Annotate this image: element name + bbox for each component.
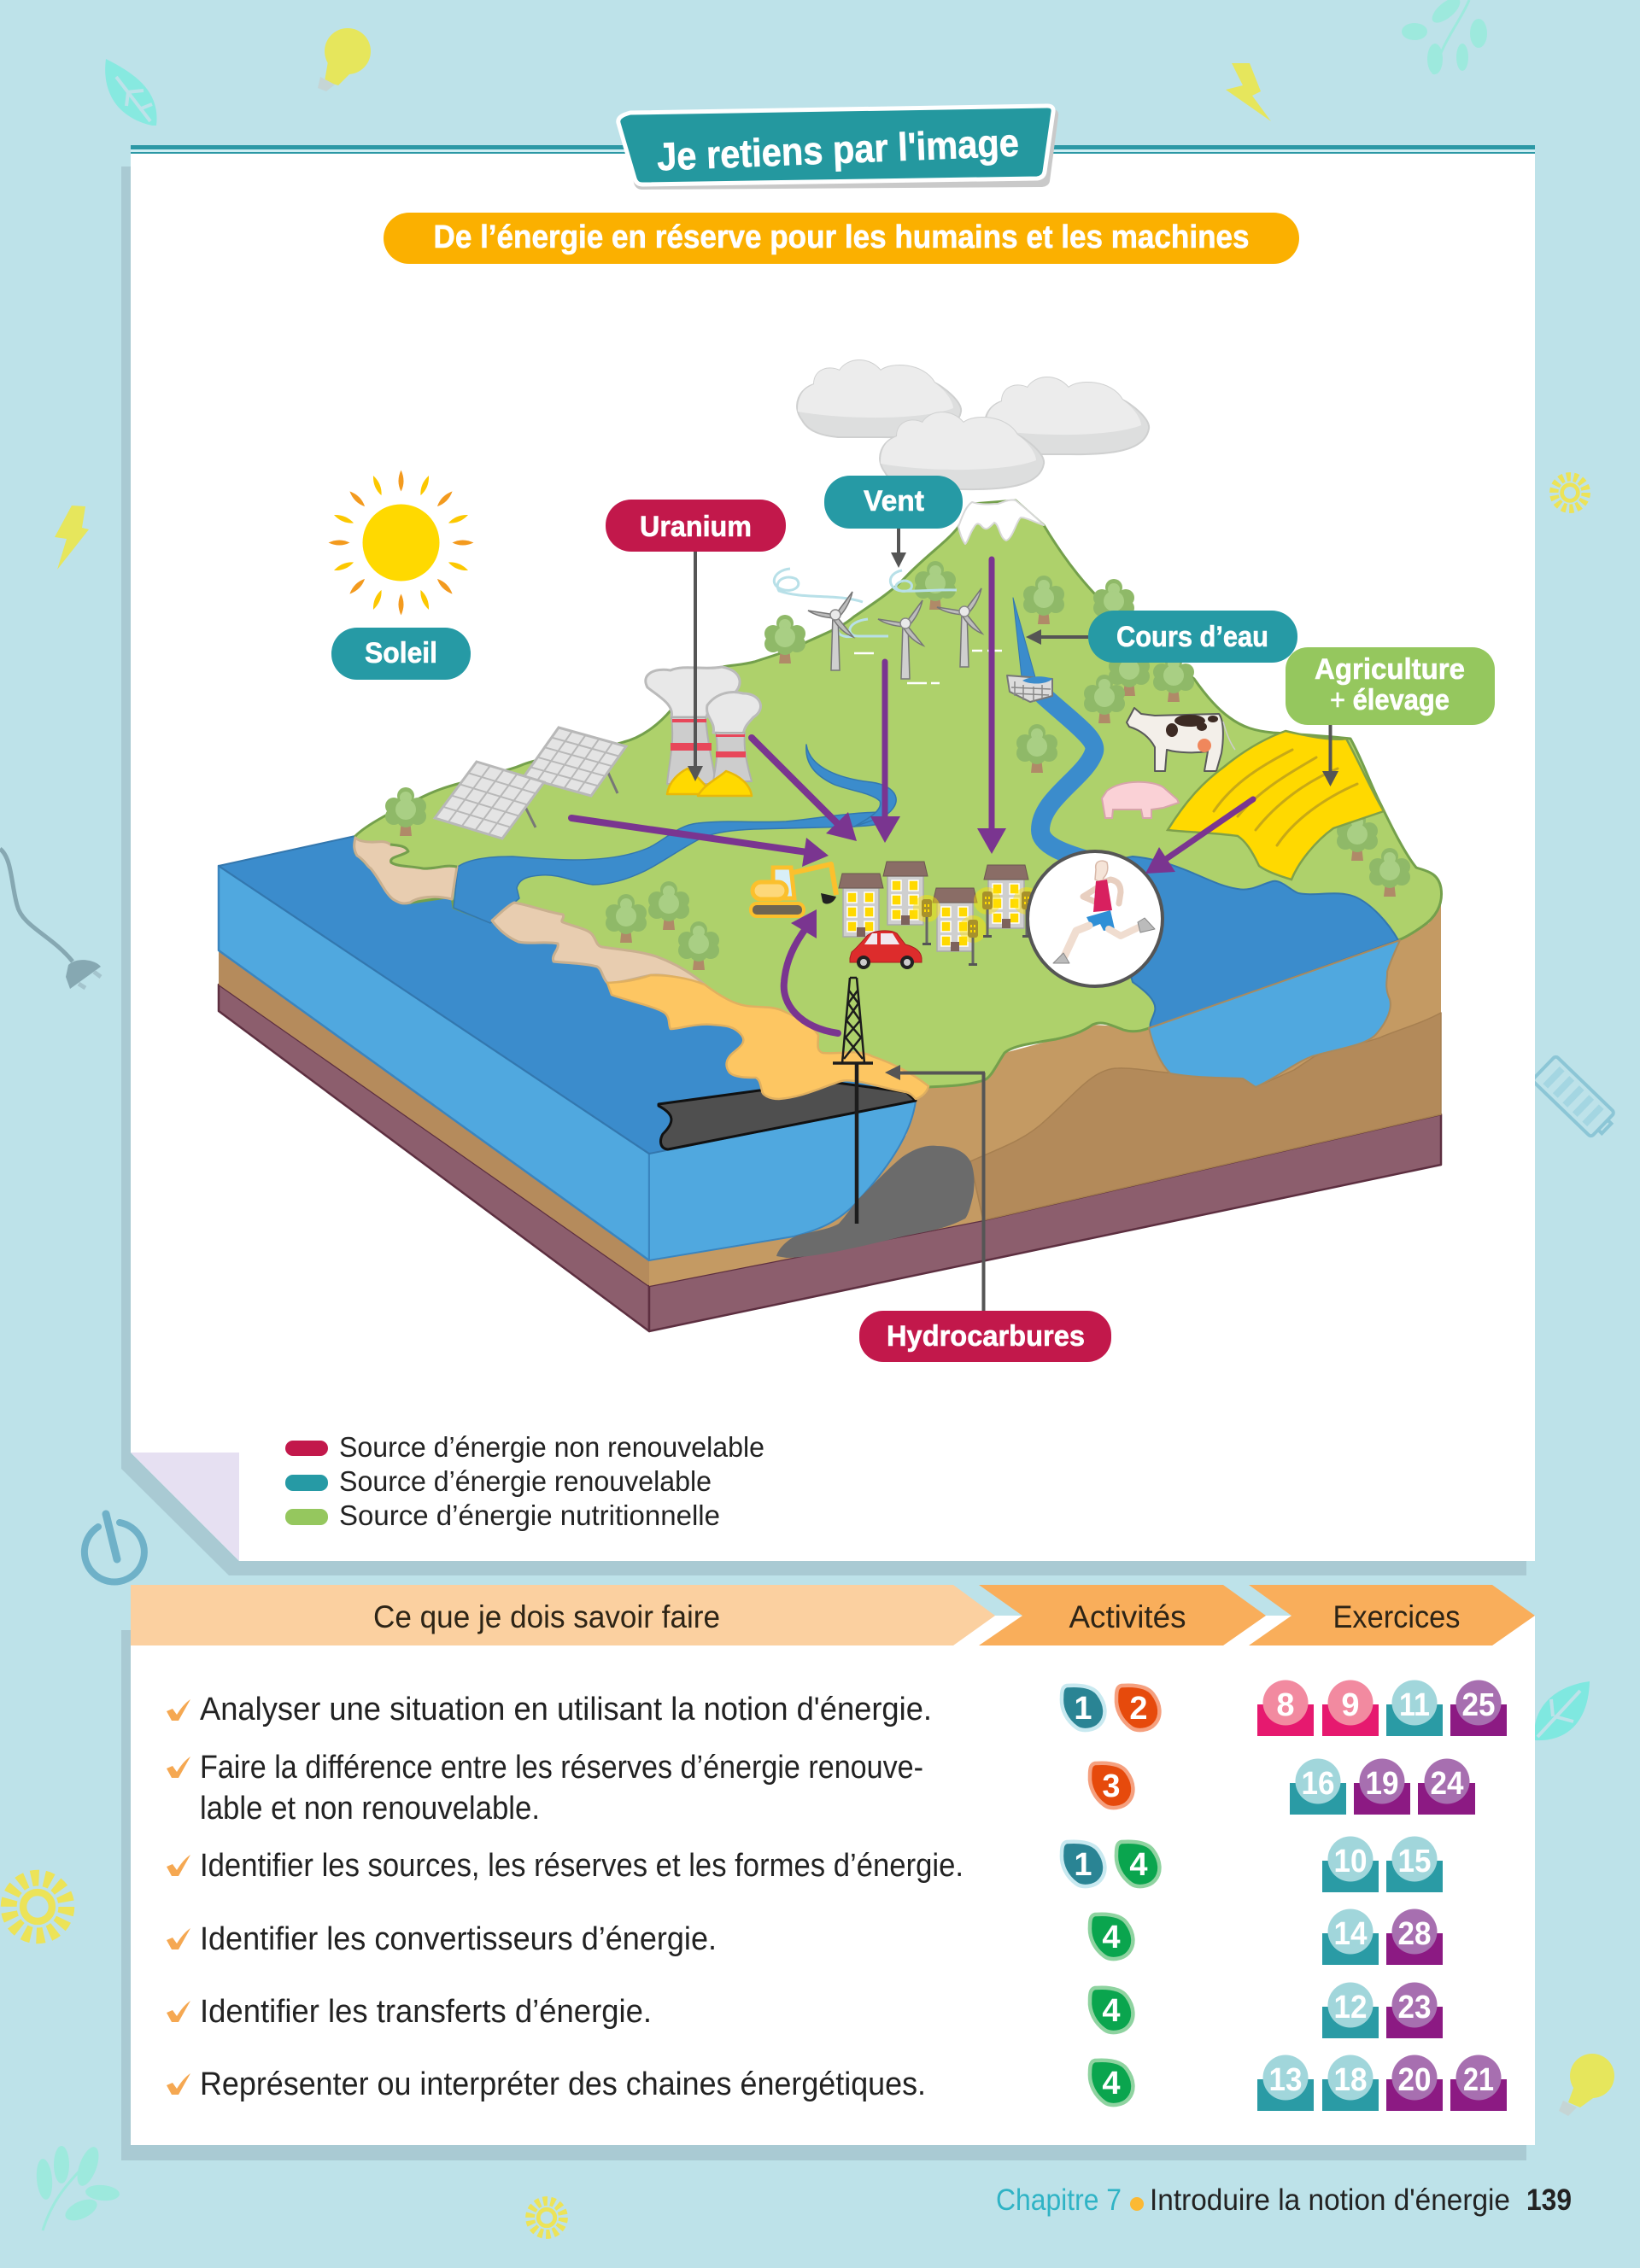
lake front water <box>1149 940 1400 1087</box>
snow cap <box>958 500 1044 544</box>
seabed oil slick <box>659 1083 916 1149</box>
footer: Chapitre 7 <box>996 2183 1122 2217</box>
legend: Source d’énergie renouvelable <box>339 1465 712 1497</box>
row 2 <box>1090 1763 1133 1808</box>
arrow: solar <box>571 818 829 867</box>
row 1: 2 <box>1129 1691 1148 1727</box>
table header: activities: Activités <box>1069 1599 1186 1634</box>
row 3 <box>1062 1842 1159 1886</box>
decoration: sun left <box>9 1878 67 1936</box>
pale beach north <box>354 838 457 903</box>
page fold <box>131 1453 239 1561</box>
activity badges <box>1062 1686 1159 2105</box>
decoration: branch bottom left <box>35 2144 120 2230</box>
row 3: 15 <box>1397 1844 1432 1879</box>
skill texts: Identifier les convertisseurs d’énergie. <box>200 1921 717 1957</box>
row 1: 25 <box>1462 1687 1495 1723</box>
pale beach south <box>492 903 705 985</box>
decoration: lightning top <box>1226 63 1271 121</box>
table header: skills <box>131 1585 995 1645</box>
excavator <box>751 864 836 916</box>
row 2: 24 <box>1430 1766 1464 1802</box>
row 6: 20 <box>1397 2062 1432 2098</box>
clouds <box>797 360 1149 489</box>
row 1 <box>1257 1681 1507 1736</box>
row 6 <box>1257 2055 1507 2111</box>
row 6 <box>1090 2060 1133 2105</box>
nuclear plant <box>646 667 761 796</box>
lower panel shadow <box>121 1630 1526 2160</box>
decoration: power icon <box>85 1514 144 1581</box>
row 5 <box>1322 1983 1443 2038</box>
arrow: food <box>1145 799 1253 874</box>
car <box>850 931 922 969</box>
decoration: leaf top left <box>105 59 157 126</box>
skill texts: Représenter ou interpréter des chaines énergétiques. <box>200 2066 926 2102</box>
right face light brown <box>649 898 1441 1286</box>
skill texts: lable et non renouvelable. <box>200 1791 540 1827</box>
footer: 139 <box>1526 2183 1572 2217</box>
crop field <box>1168 731 1384 880</box>
wind swirls <box>774 569 957 637</box>
pointer: vent <box>891 529 906 568</box>
label: Uranium <box>606 500 786 552</box>
label: Cours d'eau: Cours d’eau <box>1116 621 1268 653</box>
pointer: hydrocarbures <box>885 1065 986 1311</box>
runner circle <box>1028 851 1163 986</box>
row 6: 4 <box>1102 2066 1121 2101</box>
skill texts: Analyser une situation en utilisant la notion d'énergie. <box>200 1692 932 1727</box>
row 4: 14 <box>1334 1916 1367 1952</box>
land <box>355 500 1442 1087</box>
label: Vent <box>824 476 963 529</box>
solar panels <box>435 728 626 839</box>
wind dashes <box>854 651 1002 683</box>
river bend <box>806 745 896 827</box>
top rule <box>131 145 1535 154</box>
subtitle pill: De l’énergie en réserve pour les humains et les machines <box>434 219 1249 255</box>
runner <box>1053 861 1155 963</box>
pointer: uranium <box>688 552 703 781</box>
title tag: Je retiens par l'image <box>656 120 1020 178</box>
label: Agriculture + elevage: + élevage <box>1330 684 1450 716</box>
label: Soleil: Soleil <box>365 637 437 669</box>
hydrocarbon pocket <box>776 1146 974 1258</box>
row 6: 18 <box>1334 2062 1367 2098</box>
label: Hydrocarbures <box>859 1311 1111 1362</box>
skill texts <box>200 1692 964 2102</box>
row 5: 4 <box>1102 1993 1121 2029</box>
decoration: light bulb top <box>318 28 371 91</box>
pointer: agriculture <box>1322 725 1338 786</box>
skill list <box>167 1692 964 2102</box>
table header: exercises: Exercices <box>1332 1599 1461 1634</box>
main white panel <box>131 154 1535 1561</box>
checkmarks <box>167 1699 190 2095</box>
decoration: lightning left <box>55 506 89 570</box>
legend: Source d’énergie non renouvelable <box>339 1431 764 1463</box>
label: Agriculture + elevage: Agriculture <box>1315 653 1465 686</box>
legend: Source d’énergie nutritionnelle <box>339 1499 720 1531</box>
label: Hydrocarbures: Hydrocarbures <box>887 1320 1085 1353</box>
table header: skills: Ce que je dois savoir faire <box>373 1599 720 1634</box>
panel shadow <box>121 167 1526 1575</box>
skill texts: Identifier les transferts d’énergie. <box>200 1994 652 2030</box>
decoration: plug <box>0 849 101 989</box>
row 5: 23 <box>1397 1990 1432 2025</box>
row 4: 4 <box>1102 1920 1121 1955</box>
table header: exercises <box>1249 1585 1535 1645</box>
arrow: oil <box>784 909 838 1033</box>
street lamps <box>913 887 1040 966</box>
waterfall <box>1013 598 1035 677</box>
cow <box>1127 708 1235 771</box>
right face dark brown <box>970 1013 1441 1220</box>
mountain river <box>1040 696 1102 864</box>
row 2: 19 <box>1365 1766 1399 1802</box>
row 4 <box>1322 1909 1443 1965</box>
trees <box>385 561 1410 970</box>
title tag <box>618 106 1058 190</box>
label: Vent: Vent <box>864 485 924 517</box>
row 1: 8 <box>1276 1687 1295 1723</box>
row 2: 3 <box>1102 1768 1121 1804</box>
decoration: branch top right <box>1402 0 1487 74</box>
green inlet on pale beach <box>390 845 457 868</box>
row 6: 21 <box>1463 2062 1494 2098</box>
label: Cours d'eau <box>1088 611 1297 663</box>
row 3: 10 <box>1334 1844 1367 1879</box>
decoration: sun right <box>1554 476 1586 509</box>
skill texts: Identifier les sources, les réserves et les formes d’énergie. <box>200 1848 964 1884</box>
gray pointer arrows <box>688 529 1338 1311</box>
oil derrick <box>833 978 873 1224</box>
row 5: 12 <box>1334 1990 1367 2025</box>
right face purple layer <box>649 1114 1441 1331</box>
row 5 <box>1090 1988 1133 2032</box>
lake surface <box>1102 856 1398 1028</box>
row 3: 1 <box>1074 1847 1092 1883</box>
arrow: wind <box>870 662 900 843</box>
label: Soleil <box>331 628 471 680</box>
pig <box>1102 782 1179 818</box>
skill texts: Faire la différence entre les réserves d’énergie renouve- <box>200 1750 923 1786</box>
legend <box>285 1431 764 1531</box>
footer <box>996 2183 1572 2217</box>
uranium piles <box>667 769 709 794</box>
row 2 <box>1290 1759 1475 1815</box>
row 1: 11 <box>1399 1687 1430 1723</box>
sea front water <box>649 1101 916 1260</box>
exercise badges <box>1257 1681 1507 2111</box>
sun <box>328 470 473 615</box>
buildings <box>839 862 1028 951</box>
footer: Introduire la notion d'énergie <box>1150 2183 1510 2217</box>
row 3: 4 <box>1129 1847 1148 1883</box>
block diagram: terrain <box>219 500 1442 1331</box>
row 1: 1 <box>1074 1691 1092 1727</box>
decoration: bulb bottom right <box>1559 2054 1614 2116</box>
arrow: water <box>977 559 1006 854</box>
orange sand <box>607 975 928 1099</box>
subtitle pill <box>384 213 1299 264</box>
label: Agriculture + elevage <box>1286 647 1495 725</box>
wind turbines <box>808 588 982 679</box>
row 3 <box>1322 1836 1443 1892</box>
row 1 <box>1062 1686 1159 1730</box>
decoration: small sun bottom <box>530 2201 563 2234</box>
decoration: battery <box>1532 1055 1619 1141</box>
decoration: leaf right <box>1534 1681 1590 1740</box>
row 6: 13 <box>1269 2062 1302 2098</box>
lower white panel <box>131 1616 1535 2145</box>
sea surface <box>219 836 916 1154</box>
row 2: 16 <box>1302 1766 1334 1802</box>
left face layers <box>219 866 649 1331</box>
table header: activities <box>979 1585 1266 1645</box>
label: Uranium: Uranium <box>640 511 752 543</box>
row 4 <box>1090 1914 1133 1959</box>
row 1: 9 <box>1341 1687 1360 1723</box>
dam <box>1007 675 1052 702</box>
main river <box>454 812 893 923</box>
row 4: 28 <box>1397 1916 1432 1952</box>
arrow: nuclear <box>752 738 857 841</box>
purple energy arrows <box>571 559 1253 1033</box>
pointer: cours d'eau <box>1026 629 1088 645</box>
